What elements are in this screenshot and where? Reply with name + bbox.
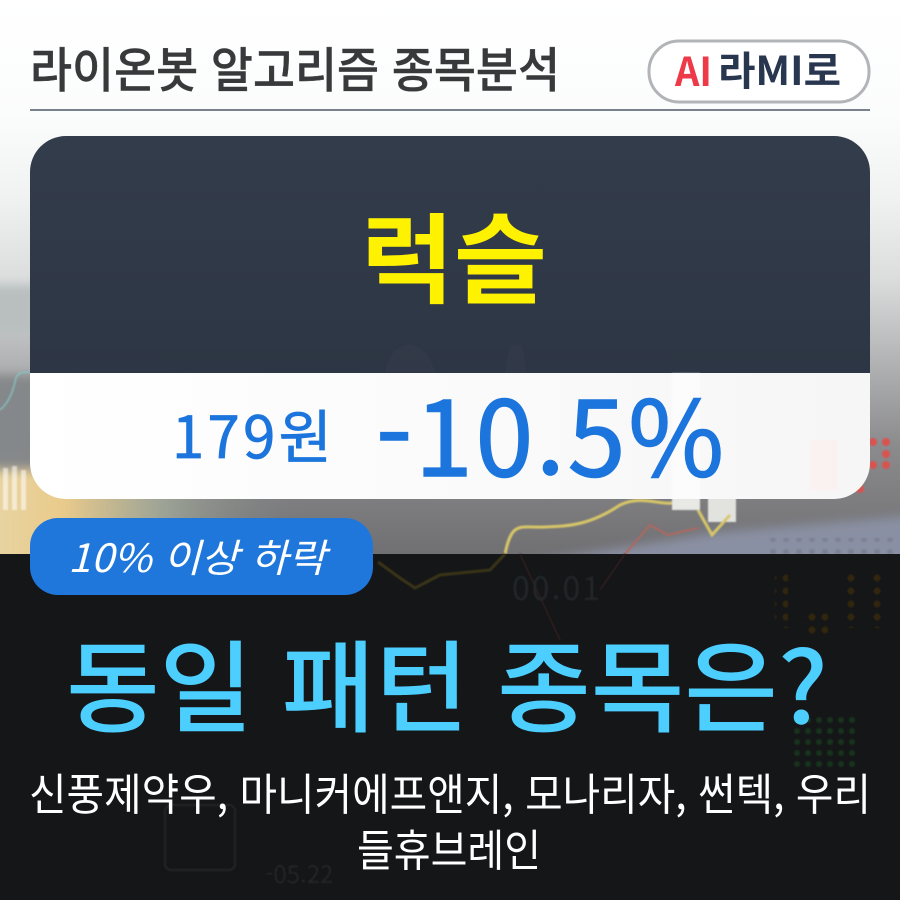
tag: 10% or more decline: 10% 이상 하락 — [68, 528, 331, 584]
text block: list of stocks — [29, 759, 871, 879]
percentage change: -10.5% — [376, 355, 724, 506]
background: blurred stock chart photo: 00.01 — [512, 564, 602, 610]
tag: 10% or more decline — [30, 518, 373, 595]
headline: same pattern stocks: 동일 패턴 종목은? — [66, 608, 828, 753]
panel top: stock name band — [30, 136, 870, 373]
panel bottom: price band — [30, 373, 870, 499]
heading: algorithm stock analysis: 라이온봇 알고리즘 종목분석 — [30, 31, 560, 101]
badge: AI라MI로 logo — [649, 39, 869, 102]
panel: stock name and price — [30, 136, 870, 506]
text block: list of stocks: 들휴브레인 — [357, 815, 541, 879]
badge: AI라MI로 logo: 라MI로 — [718, 39, 841, 97]
badge: AI라MI로 logo: AI — [674, 40, 712, 98]
price: 179원 — [172, 391, 332, 475]
background: blurred stock chart photo: -05.22 — [265, 855, 333, 890]
stock name: 럭슬 — [361, 182, 547, 324]
